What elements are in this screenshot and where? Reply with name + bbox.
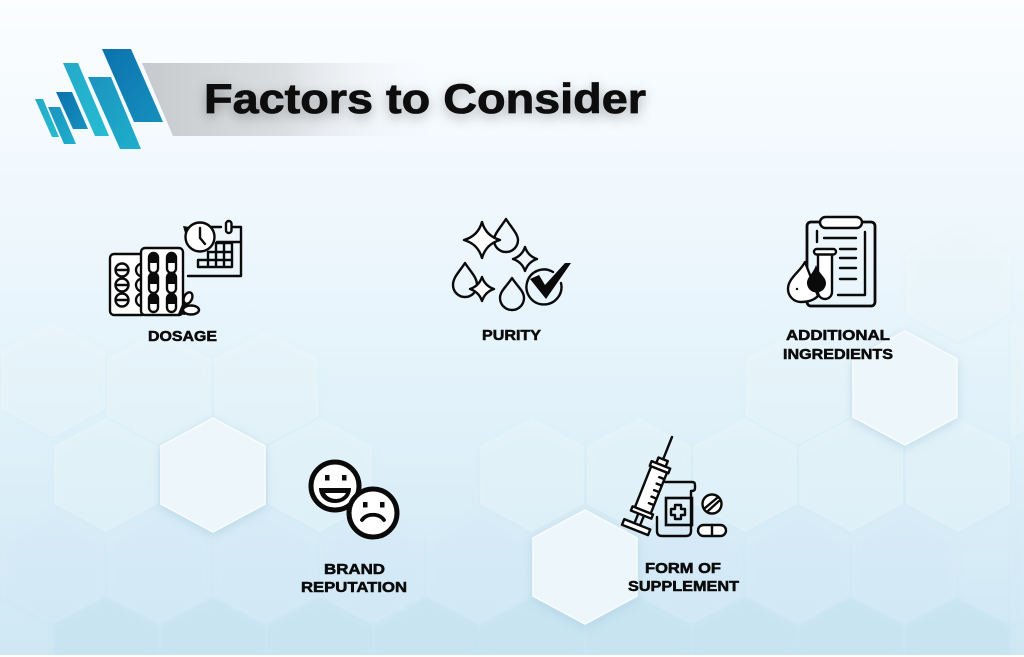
- label: dosage: DOSAGE: [148, 328, 217, 345]
- logo: [35, 49, 163, 149]
- label: form of supplement: FORM OF: [645, 560, 721, 577]
- icon: additional ingredients: [788, 217, 875, 306]
- label: purity: PURITY: [482, 327, 541, 344]
- title: Factors to Consider: [204, 75, 646, 122]
- icon: purity: [453, 219, 571, 310]
- label: additional ingredients: ADDITIONAL: [786, 327, 890, 344]
- icon: form of supplement: [622, 432, 726, 536]
- label: additional ingredients: [783, 327, 893, 363]
- label: form of supplement: SUPPLEMENT: [628, 578, 739, 595]
- icon: dosage: [110, 221, 241, 315]
- raised white hexagons: [161, 331, 957, 624]
- label: brand reputation: REPUTATION: [301, 579, 407, 596]
- hexagon pattern: [1, 228, 1024, 657]
- label: additional ingredients: INGREDIENTS: [783, 346, 893, 363]
- label: form of supplement: [628, 560, 739, 595]
- label: brand reputation: BRAND: [324, 561, 385, 578]
- icon: brand reputation: [311, 462, 397, 537]
- title band: [142, 63, 430, 136]
- label: brand reputation: [301, 561, 407, 596]
- bottom edge strip: [0, 655, 1024, 657]
